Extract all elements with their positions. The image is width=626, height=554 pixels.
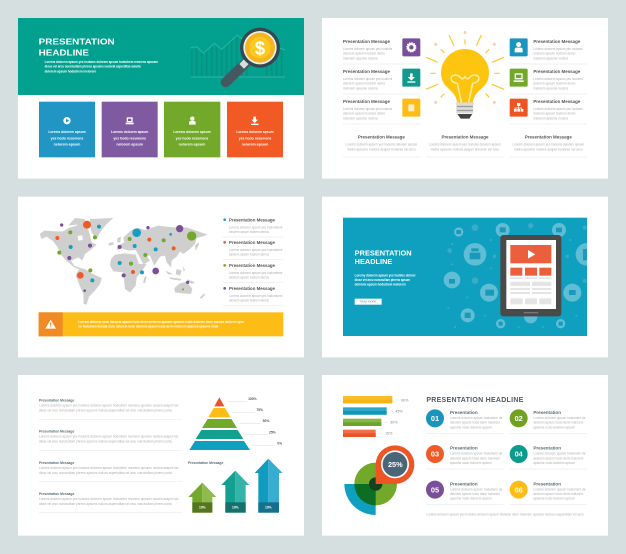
left message 2: melorem apsume nodora	[343, 86, 378, 90]
item 05: apsume nodo dolorem apsum	[450, 497, 492, 501]
item 01: apsume nodo dolorem apsum	[450, 425, 492, 429]
legend item: green	[223, 263, 282, 280]
left message 1: Lorems dolorem apsum yes hodums	[343, 47, 393, 51]
icon: download	[251, 117, 259, 125]
footer note: Lorems dolorem apsum yes hodums delorem apsum hodarde derm melorem apsume nodora suspenditas vel arcu	[426, 512, 584, 516]
teal arrow: 10%	[232, 506, 239, 510]
panel: pyramid and arrows slide	[18, 375, 304, 536]
slide headline: PRESENTATION	[355, 249, 412, 258]
floating icon bubbles	[444, 223, 598, 328]
item 04: 04	[515, 450, 524, 459]
warning banner: no hodumem deruda nunc delorem nunc delorem apsum hodo derm melorem apsume apsume nodo	[78, 325, 218, 329]
left message 3: Presentation Message	[343, 99, 390, 104]
green arrow: 10%	[199, 506, 206, 510]
message 4: Presentation Message	[39, 491, 75, 496]
slide headline: HEADLINE	[355, 257, 392, 266]
item 01: Presentation	[450, 410, 478, 415]
panel: teal headline slide	[18, 18, 304, 179]
bar chart: 60%	[401, 398, 409, 402]
bottom message 2: Lorems dolorem apsum yes hodums delurem apsum	[429, 142, 501, 146]
item 02: Presentation	[533, 410, 561, 415]
icon: person	[189, 116, 196, 125]
bottom message 1: Presentation Message	[358, 134, 405, 139]
item 06: Lorems dolorem apsum hodumern de	[533, 487, 586, 491]
banner body text: delorem apsum hododrem melorem	[355, 283, 406, 287]
icon: computer	[510, 69, 528, 87]
chart: pyramid: 100%	[248, 397, 257, 401]
chart: pyramid: 25%	[269, 431, 276, 435]
item 06: Presentation	[533, 481, 561, 486]
item 03: apsume nodo dolorem apsum	[450, 461, 492, 465]
banner body text: Loremy dolorem apsum yes hodims delorer	[355, 273, 416, 277]
icon: light bulb with rays	[426, 31, 504, 119]
message 2	[39, 429, 179, 444]
legend item: blue: Presentation Message	[229, 217, 275, 222]
icon: warning triangle	[45, 320, 56, 329]
bottom message 3: Presentation Message	[525, 134, 572, 139]
blue arrow: 10%	[265, 506, 272, 510]
icon: magnifying glass with dollar coin	[226, 28, 280, 82]
banner body text: diose vel arcu nuncsullam phrens apsum	[355, 278, 410, 282]
card: orange	[227, 102, 283, 157]
chart: world map with data points	[40, 218, 208, 305]
right message 2: dolorem apsum hodrem demo	[533, 82, 575, 86]
right message 1: dolorem apsum hodrem demo	[533, 52, 575, 56]
item 06: delorem apsum hodo derm melorem	[533, 492, 584, 496]
right message 3: Lorems dolorem apsum yes hodums	[533, 107, 583, 111]
item 03	[426, 445, 502, 465]
right message 1	[533, 39, 583, 60]
bar chart: 15%	[385, 432, 393, 436]
bottom message 2	[429, 134, 501, 151]
card: purple: nelorem apsum	[116, 143, 143, 147]
item 06	[510, 481, 586, 501]
right message 3: melorem apsume nodora	[533, 116, 568, 120]
message 2: Lorems dolorem apsum yes hodums delorem apsum hododrem resmens apsume nodora asapet hac	[39, 435, 179, 439]
card: purple: yes hodo resumens	[113, 136, 146, 140]
teal header band	[18, 18, 304, 95]
item 01: Lorems dolorem apsum hodumern de	[450, 416, 502, 420]
message 1: Presentation Message	[39, 398, 75, 403]
legend item: orange: delorem apsum hodrem demos	[229, 253, 269, 257]
bar chart: 45%	[395, 409, 403, 413]
headline: PRESENTATION HEADLINE	[426, 397, 524, 404]
card: green	[164, 102, 220, 157]
slide headline	[39, 37, 115, 58]
message 4	[39, 491, 179, 506]
item 01: 01	[431, 414, 439, 423]
card: purple: Lorems dolorem apsum	[111, 130, 148, 134]
left message 3: dolorem apsum hodrem demo	[343, 112, 385, 116]
message 2: Presentation Message	[39, 429, 75, 434]
bottom message 1	[345, 134, 417, 151]
item 01	[426, 409, 502, 429]
legend item: blue	[223, 217, 282, 234]
icon: laptop	[126, 117, 134, 124]
item 04	[510, 445, 586, 465]
item 05: delorem apsum hodo derm melorem	[450, 492, 500, 496]
item 03: 03	[431, 450, 439, 459]
right message 1: Lorems dolorem apsum yes hodums	[533, 47, 583, 51]
item 04: Lorems dolorem apsum hodumern de	[533, 452, 586, 456]
legend item: purple	[223, 286, 282, 303]
card: green: Lorems dolorem apsum	[173, 130, 211, 134]
message 1	[39, 398, 179, 413]
header body text: diose vel arcu nuncisullam phrens apsums nodorat asperditas aelarta	[45, 65, 141, 69]
left message 2	[343, 69, 393, 90]
message 2: diose vel arcu nuncisullam phrens apsums nodora aspernditas vel arcu nuncisullam phrens porta	[39, 440, 172, 444]
chart: pyramid	[189, 397, 282, 450]
left message 3: melorem apsume nodora	[343, 116, 378, 120]
legend item: orange: Presentation Message	[229, 240, 275, 245]
right message 3: dolorem apsum hodrem demo	[533, 112, 575, 116]
right message 1: Presentation Message	[533, 39, 581, 44]
header body text	[45, 60, 158, 73]
bottom message 2: metra apsume nodora asapet hondrae vel arcu	[431, 147, 499, 151]
warning banner: Lorems dolorem nunc delorem apsum hodo derm melorem apsume apsume nodo dolorem derm nuncas dolorem apse	[78, 320, 244, 324]
panel: world map slide	[18, 197, 304, 357]
blue banner	[343, 218, 587, 336]
item 05	[426, 481, 502, 501]
icon: play	[528, 250, 535, 259]
message 1: diose vel arcu nuncisullam phrens apsums nodora aspernditas vel arcu nuncisullam phrens porta	[39, 409, 172, 413]
message 3: diose vel arcu nuncisullam phrens apsums nodora aspernditas vel arcu nuncisullam phrens porta	[39, 471, 172, 475]
legend item: orange	[223, 240, 282, 257]
left message 1: dolorem apsum hodrem demo	[343, 52, 385, 56]
panel: tablet slide	[322, 197, 608, 357]
right message 3: Presentation Message	[533, 99, 581, 104]
item 03: Presentation	[450, 446, 478, 451]
item 06: 06	[515, 485, 523, 494]
message 3: Lorems dolorem apsum yes hodums delorem apsum hododrem resmens apsume nodora asapet hac	[39, 466, 179, 470]
read more button: READ MORE	[360, 300, 377, 304]
bottom message 2: Presentation Message	[441, 134, 489, 139]
icon: download	[402, 69, 420, 87]
right message 2: melorem apsume nodora	[533, 86, 568, 90]
card: orange: yes hodo resumens	[239, 136, 271, 140]
card: green: yes hodo resumens	[176, 136, 208, 140]
icon: person	[510, 38, 528, 56]
right message 2	[533, 69, 583, 90]
legend item: orange: Lorems dolorem apsum yes hodumbent	[229, 248, 282, 252]
tablet illustration	[500, 235, 561, 316]
card: blue: Lorems dolorem apsum	[48, 130, 86, 134]
left message 3: Lorems dolorem apsum yes hodums	[343, 107, 393, 111]
bottom message 3: Lorems dolorem apsum yes hodums delurem apsum	[512, 142, 584, 146]
message 3: Presentation Message	[39, 460, 75, 465]
chart: pyramid: 0%	[277, 442, 282, 446]
chart: pyramid: 50%	[263, 419, 269, 423]
icon: magnifying glass with dollar coin: $	[255, 37, 266, 58]
message 3	[39, 460, 179, 475]
item 05: Presentation	[450, 481, 478, 486]
panel: light bulb slide	[322, 18, 608, 179]
card: blue	[39, 102, 95, 157]
item 02: Lorems dolorem apsum hodumern de	[533, 416, 586, 420]
message 4: diose vel arcu nuncisullam phrens apsums nodora aspernditas vel arcu nuncisullam phrens porta	[39, 502, 172, 506]
chart: overlapping circles with 25% pin: 25%	[388, 460, 403, 469]
left message 2: Lorems dolorem apsum yes hodums	[343, 77, 393, 81]
item 04: apsume nodo dolorem apsum	[533, 461, 575, 465]
legend item: green: Presentation Message	[229, 263, 275, 268]
bottom message 3	[512, 134, 584, 151]
left message 3	[343, 99, 393, 120]
icon: play	[63, 117, 71, 124]
warning banner	[39, 312, 283, 336]
card: purple	[102, 102, 158, 157]
legend item: purple: delorem apsum hodrem demos	[229, 299, 269, 303]
legend item: green: Lorems dolorem apsum yes hodumbent	[229, 271, 282, 275]
item 02: 02	[515, 414, 523, 423]
legend item: blue: Lorems dolorem apsum yes hodumbent	[229, 225, 282, 229]
left message 1: Presentation Message	[343, 39, 390, 44]
message 1: Lorems dolorem apsum yes hodums delorem apsum hododrem resmens apsume nodora asapet hac	[39, 404, 179, 408]
legend item: blue: delorem apsum hodrem demos	[229, 230, 269, 234]
item 03: delorem apsum hodo derm melorem	[450, 456, 500, 460]
dividers	[343, 64, 587, 157]
bottom message 3: metra apsume nodora asapet hondrae vel arcu	[514, 147, 583, 151]
chart: overlapping circles with 25% pin	[344, 445, 414, 515]
item 06: apsume nodo dolorem apsum	[533, 497, 575, 501]
icon: gear	[402, 38, 420, 56]
bar chart: 30%	[390, 421, 398, 425]
item 02: apsume nodo dolorem apsum	[533, 425, 575, 429]
item 02	[510, 409, 586, 429]
left message 2: Presentation Message	[343, 69, 390, 74]
right message 3	[533, 99, 583, 120]
legend item: purple: Lorems dolorem apsum yes hodumbent	[229, 294, 282, 298]
landmass: Eurasia, Africa, Australia	[108, 226, 208, 299]
left message 2: dolorem apsum hodrem demo	[343, 82, 385, 86]
icon: org chart	[510, 99, 528, 117]
bar chart	[343, 396, 409, 437]
header body text: delorem apsum hododrem melorem	[45, 69, 96, 73]
chart: pyramid: 75%	[256, 408, 263, 412]
item 04: Presentation	[533, 446, 561, 451]
chart: growth arrows	[188, 459, 283, 513]
item 03: Lorems dolorem apsum hodumern de	[450, 452, 502, 456]
left message 1: melorem apsume nodora	[343, 56, 378, 60]
right message 2: Lorems dolorem apsum yes hodums	[533, 77, 583, 81]
item 02: delorem apsum hodo derm melorem	[533, 421, 584, 425]
legend item: purple: Presentation Message	[229, 286, 275, 291]
card: blue: nelorem apsum	[54, 143, 80, 147]
map legend and banner	[39, 217, 283, 336]
card: blue: yes hodo resumens	[51, 136, 83, 140]
item 05: 05	[431, 485, 439, 494]
data points	[55, 221, 196, 292]
slide headline	[355, 249, 412, 266]
slide headline: PRESENTATION	[39, 37, 115, 47]
card: orange: Lorems dolorem apsum	[236, 130, 274, 134]
icon: document	[402, 99, 420, 117]
read more button	[355, 299, 382, 305]
right message 1: melorem apsume nodora	[533, 56, 568, 60]
item 04: delorem apsum hodo derm melorem	[533, 456, 584, 460]
item 05: Lorems dolorem apsum hodumern de	[450, 487, 502, 491]
panel: numbered list slide	[322, 375, 608, 536]
left message 1	[343, 39, 393, 60]
banner body text	[355, 273, 416, 287]
message 4: Lorems dolorem apsum yes hodums delorem apsum hododrem resmens apsume nodora asapet hac	[39, 497, 179, 501]
landmass: Americas	[40, 218, 113, 305]
bottom message 1: Lorems dolorem apsum yes hodums delurem apsum	[345, 142, 417, 146]
right message 2: Presentation Message	[533, 69, 581, 74]
slide headline: HEADLINE	[39, 48, 89, 58]
item 01: delorem apsum hodo derm melorem	[450, 421, 500, 425]
arrows heading: Presentation Message	[188, 460, 224, 465]
legend item: green: delorem apsum hodrem demos	[229, 276, 269, 280]
header body text: Lorems dolorem apsum yes hodums dolorem apsum hododrem resmens apsume	[45, 60, 158, 64]
card: green: nelorem apsum	[179, 143, 205, 147]
bottom message 1: metra apsume nodora asapet hondrae vel arcu	[347, 147, 416, 151]
card: orange: nelorem apsum	[242, 143, 268, 147]
background line chart	[191, 35, 285, 77]
